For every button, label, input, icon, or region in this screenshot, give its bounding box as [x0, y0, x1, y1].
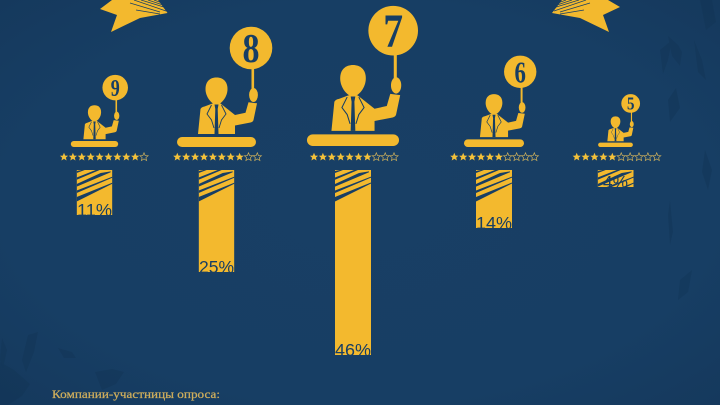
- bar: 11%: [77, 170, 113, 220]
- judge with sign 7: [307, 5, 418, 146]
- bar: 14%: 14%: [476, 213, 512, 233]
- column: rating 9: [60, 75, 148, 220]
- bar: 25%: [199, 170, 235, 277]
- judge with sign 6: 6: [515, 54, 526, 89]
- stars: 6 of 10: [450, 153, 538, 160]
- judge with sign 7: 7: [383, 5, 403, 58]
- bar: 25%: 25%: [199, 257, 234, 277]
- judge with sign 8: 8: [242, 25, 260, 71]
- stars: 9 of 10: [60, 153, 148, 160]
- judge with sign 5: 5: [627, 94, 634, 114]
- judge with sign 9: 9: [111, 75, 120, 102]
- column: rating 7: [307, 5, 418, 360]
- stars: 7 of 10: [310, 153, 398, 160]
- judge with sign 9: [71, 75, 128, 147]
- column: rating 5: [572, 94, 662, 187]
- column: rating 6: [450, 54, 538, 233]
- bar: 11%: 11%: [77, 200, 112, 220]
- survey participants heading: Компании-участницы опроса:: [52, 387, 220, 401]
- ribbon: left: [100, 0, 168, 32]
- judge with sign 8: [177, 25, 272, 147]
- bar: 4%: 4%: [603, 172, 628, 192]
- column: rating 8: [173, 25, 272, 277]
- bar: 46%: 46%: [335, 340, 371, 360]
- bar: 14%: [476, 170, 512, 233]
- bar: 46%: [335, 170, 371, 360]
- stars: 8 of 10: [173, 153, 261, 160]
- ribbon: right: [552, 0, 620, 32]
- judge with sign 6: [464, 54, 536, 147]
- stars: 5 of 10: [573, 153, 661, 160]
